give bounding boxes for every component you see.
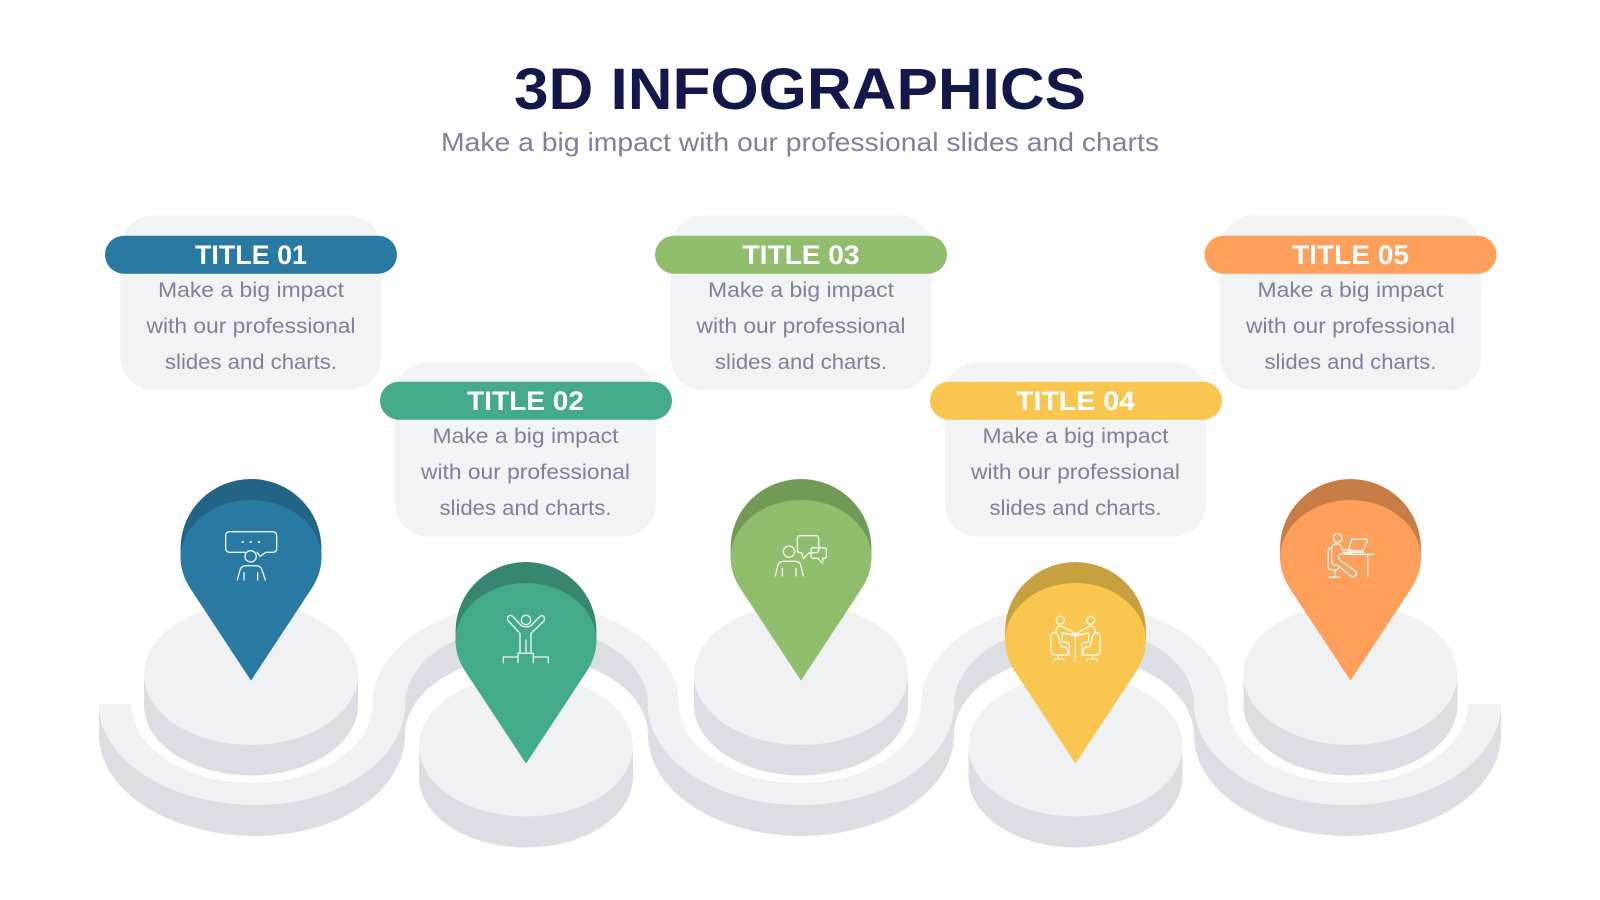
text block 03: slides and charts. xyxy=(715,350,887,374)
text block 02: with our professional xyxy=(420,460,630,484)
pedestal 4 xyxy=(968,676,1182,848)
text block 04: with our professional xyxy=(970,460,1180,484)
heading pill 01 xyxy=(105,236,397,274)
pedestal 5 xyxy=(1244,604,1458,776)
text block 03: Make a big impact xyxy=(708,278,894,302)
text block 03 xyxy=(695,278,906,374)
text block 02 xyxy=(420,424,630,520)
panel: title 02 xyxy=(380,362,672,536)
text block 05: slides and charts. xyxy=(1264,350,1436,374)
text block 01: Make a big impact xyxy=(158,278,344,302)
heading pill 02: TITLE 02 xyxy=(467,386,584,416)
pedestal 1 xyxy=(144,604,358,775)
heading pill 05 xyxy=(1204,236,1496,274)
icon: two people seated at a table xyxy=(1051,616,1100,662)
heading pill 03 xyxy=(655,236,947,274)
panel: title 05 xyxy=(1204,216,1496,390)
pedestal 2 xyxy=(419,676,633,848)
panel: title 01 xyxy=(105,216,397,390)
icon: person speaking with speech bubble xyxy=(226,532,277,580)
text block 04 xyxy=(970,424,1180,520)
panel: title 03 xyxy=(655,216,947,390)
heading pill 03: TITLE 03 xyxy=(742,240,860,270)
text block 01 xyxy=(145,278,356,374)
text block 03: with our professional xyxy=(695,314,906,338)
icon: person with two chat bubbles xyxy=(775,536,826,576)
icon: person working at a laptop desk xyxy=(1328,534,1373,577)
text block 05: Make a big impact xyxy=(1258,278,1444,302)
text block 04: slides and charts. xyxy=(990,496,1162,520)
text block 02: slides and charts. xyxy=(440,496,612,520)
winding 3D ribbon base xyxy=(99,603,1501,836)
map pin 1 xyxy=(181,479,321,681)
map pin 4 xyxy=(1005,562,1146,764)
heading pill 02 xyxy=(380,382,672,420)
heading pill 04: TITLE 04 xyxy=(1016,386,1135,416)
heading pill 01: TITLE 01 xyxy=(195,240,307,270)
text block 04: Make a big impact xyxy=(982,424,1169,448)
heading pill 04 xyxy=(930,382,1222,420)
icon: person with raised arms on podium xyxy=(503,615,548,663)
text block 02: Make a big impact xyxy=(432,424,619,448)
text block 01: slides and charts. xyxy=(165,350,337,374)
pedestal 3 xyxy=(694,604,908,776)
text block 05 xyxy=(1245,278,1455,374)
map pin 5 xyxy=(1280,479,1421,681)
text block 05: with our professional xyxy=(1245,314,1455,338)
heading pill 05: TITLE 05 xyxy=(1292,240,1409,270)
map pin 3 xyxy=(731,479,871,681)
title: 3D INFOGRAPHICS xyxy=(514,57,1086,122)
subtitle: Make a big impact with our professional slides and charts xyxy=(441,127,1159,157)
panel: title 04 xyxy=(930,362,1222,536)
text block 01: with our professional xyxy=(145,314,356,338)
map pin 2 xyxy=(456,562,596,764)
